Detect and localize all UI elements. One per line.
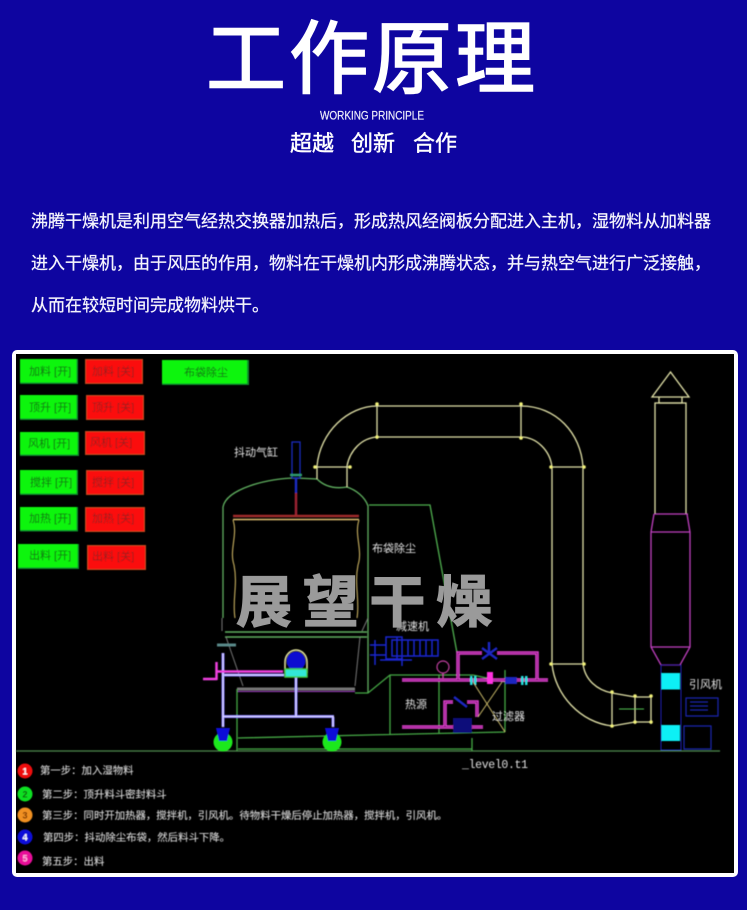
button: heat on: 加热 [开] — [29, 512, 71, 525]
label: level: _level0.t1 — [461, 759, 528, 772]
intro paragraph: 进入干燥机，由于风压的作用，物料在干燥机内形成沸腾状态，并与热空气进行广泛接触， — [31, 254, 711, 273]
label: air cylinder: 抖动气缸 — [234, 445, 278, 459]
button: discharge on: 出料 [开] — [29, 548, 71, 562]
chimney cap — [652, 372, 689, 403]
button: feed on: 加料 [开] — [29, 364, 71, 378]
ducting — [315, 404, 651, 727]
step 5: 第五步：出料 — [42, 855, 105, 868]
subtitle: working principle: WORKING PRINCIPLE — [320, 110, 424, 122]
step 2: 第二步：顶升料斗密封料斗 — [42, 788, 167, 801]
step 3: 第三步：同时开加热器，搅拌机，引风机。待物料干燥后停止加热器，搅拌机，引风机。 — [42, 809, 447, 822]
drying vessel — [223, 478, 368, 693]
process steps — [18, 764, 447, 868]
base frame — [237, 670, 505, 751]
button: stir off — [86, 470, 144, 495]
button: heat on — [20, 507, 78, 532]
duct connector — [619, 708, 644, 710]
valves — [453, 642, 528, 733]
filter cross — [473, 682, 505, 732]
label: filter: 过滤器 — [492, 710, 525, 723]
feed pump — [285, 650, 307, 677]
slogan: 超越 — [290, 131, 334, 156]
step 5 — [18, 850, 105, 868]
intro paragraph: 从而在较短时间完成物料烘干。 — [31, 296, 269, 315]
button: fan off — [85, 431, 145, 455]
slogan: 创新 — [351, 131, 395, 156]
diagram labels — [234, 445, 722, 772]
watermark: 展望干燥 — [236, 571, 503, 634]
step 4: 4 — [22, 832, 28, 842]
label: draught fan: 引风机 — [689, 677, 722, 691]
cart frame — [223, 653, 334, 727]
label: heat source: 热源 — [405, 697, 427, 711]
ground line — [16, 750, 720, 752]
control buttons — [18, 359, 249, 570]
button: feed off — [85, 359, 143, 384]
slogan: 合作 — [413, 131, 457, 156]
filter bag sides — [232, 520, 360, 618]
button: heat off — [85, 507, 145, 532]
step 2: 2 — [22, 790, 28, 800]
step 4: 第四步：抖动除尘布袋，然后料斗下降。 — [43, 831, 230, 844]
button: stir on: 搅拌 [开] — [30, 475, 72, 489]
button: fan off: 风机 [关] — [90, 435, 132, 449]
step 4 — [18, 830, 230, 844]
button: feed off: 加料 [关] — [92, 364, 134, 378]
step 1 — [18, 764, 134, 778]
button: discharge off: 出料 [关] — [92, 549, 134, 563]
button: lift on: 顶升 [开] — [29, 401, 71, 414]
title: 工作原理 — [206, 15, 538, 104]
heat pipework — [402, 653, 548, 727]
button: bag dust removal: 布袋除尘 — [184, 365, 228, 379]
label: bag dust: 布袋除尘 — [372, 541, 416, 555]
button: fan on — [20, 432, 79, 456]
draught fan — [661, 665, 718, 750]
pressure gauge — [437, 661, 449, 680]
step 1: 1 — [22, 766, 28, 776]
hopper — [217, 618, 368, 692]
filter bag top bar — [233, 516, 359, 520]
button: bag dust removal — [162, 360, 249, 385]
machine schematic — [16, 372, 720, 752]
step 5: 5 — [22, 854, 28, 864]
step 3 — [18, 808, 447, 822]
chimney upper — [655, 403, 686, 514]
button: discharge off — [87, 545, 146, 570]
button: stir on — [20, 470, 78, 495]
button: stir off: 搅拌 [关] — [92, 475, 134, 489]
button: lift off: 顶升 [关] — [92, 400, 134, 414]
chimney silencer — [651, 514, 690, 665]
button: fan on: 风机 [开] — [28, 436, 70, 450]
feed pipe and crank — [203, 662, 283, 680]
air cylinder — [290, 442, 302, 515]
duct flange bolts — [313, 402, 653, 728]
button: discharge on — [18, 544, 79, 569]
label: reducer: 减速机 — [396, 619, 429, 633]
button: lift off — [86, 395, 144, 420]
bag dust housing — [369, 505, 457, 653]
button: heat off: 加热 [关] — [92, 511, 134, 525]
step 3: 3 — [22, 810, 28, 820]
button: lift on — [20, 395, 78, 420]
intro paragraph: 沸腾干燥机是利用空气经热交换器加热后，形成热风经阀板分配进入主机，湿物料从加料器 — [31, 212, 711, 231]
intro paragraph — [31, 212, 711, 315]
button: feed on — [20, 359, 78, 384]
step 2 — [18, 786, 167, 802]
cart frame highlight — [223, 653, 334, 727]
panel: control diagram — [12, 350, 738, 877]
step 1: 第一步：加入湿物料 — [40, 764, 134, 777]
reducer motor — [370, 637, 438, 666]
caster wheels — [214, 728, 342, 752]
